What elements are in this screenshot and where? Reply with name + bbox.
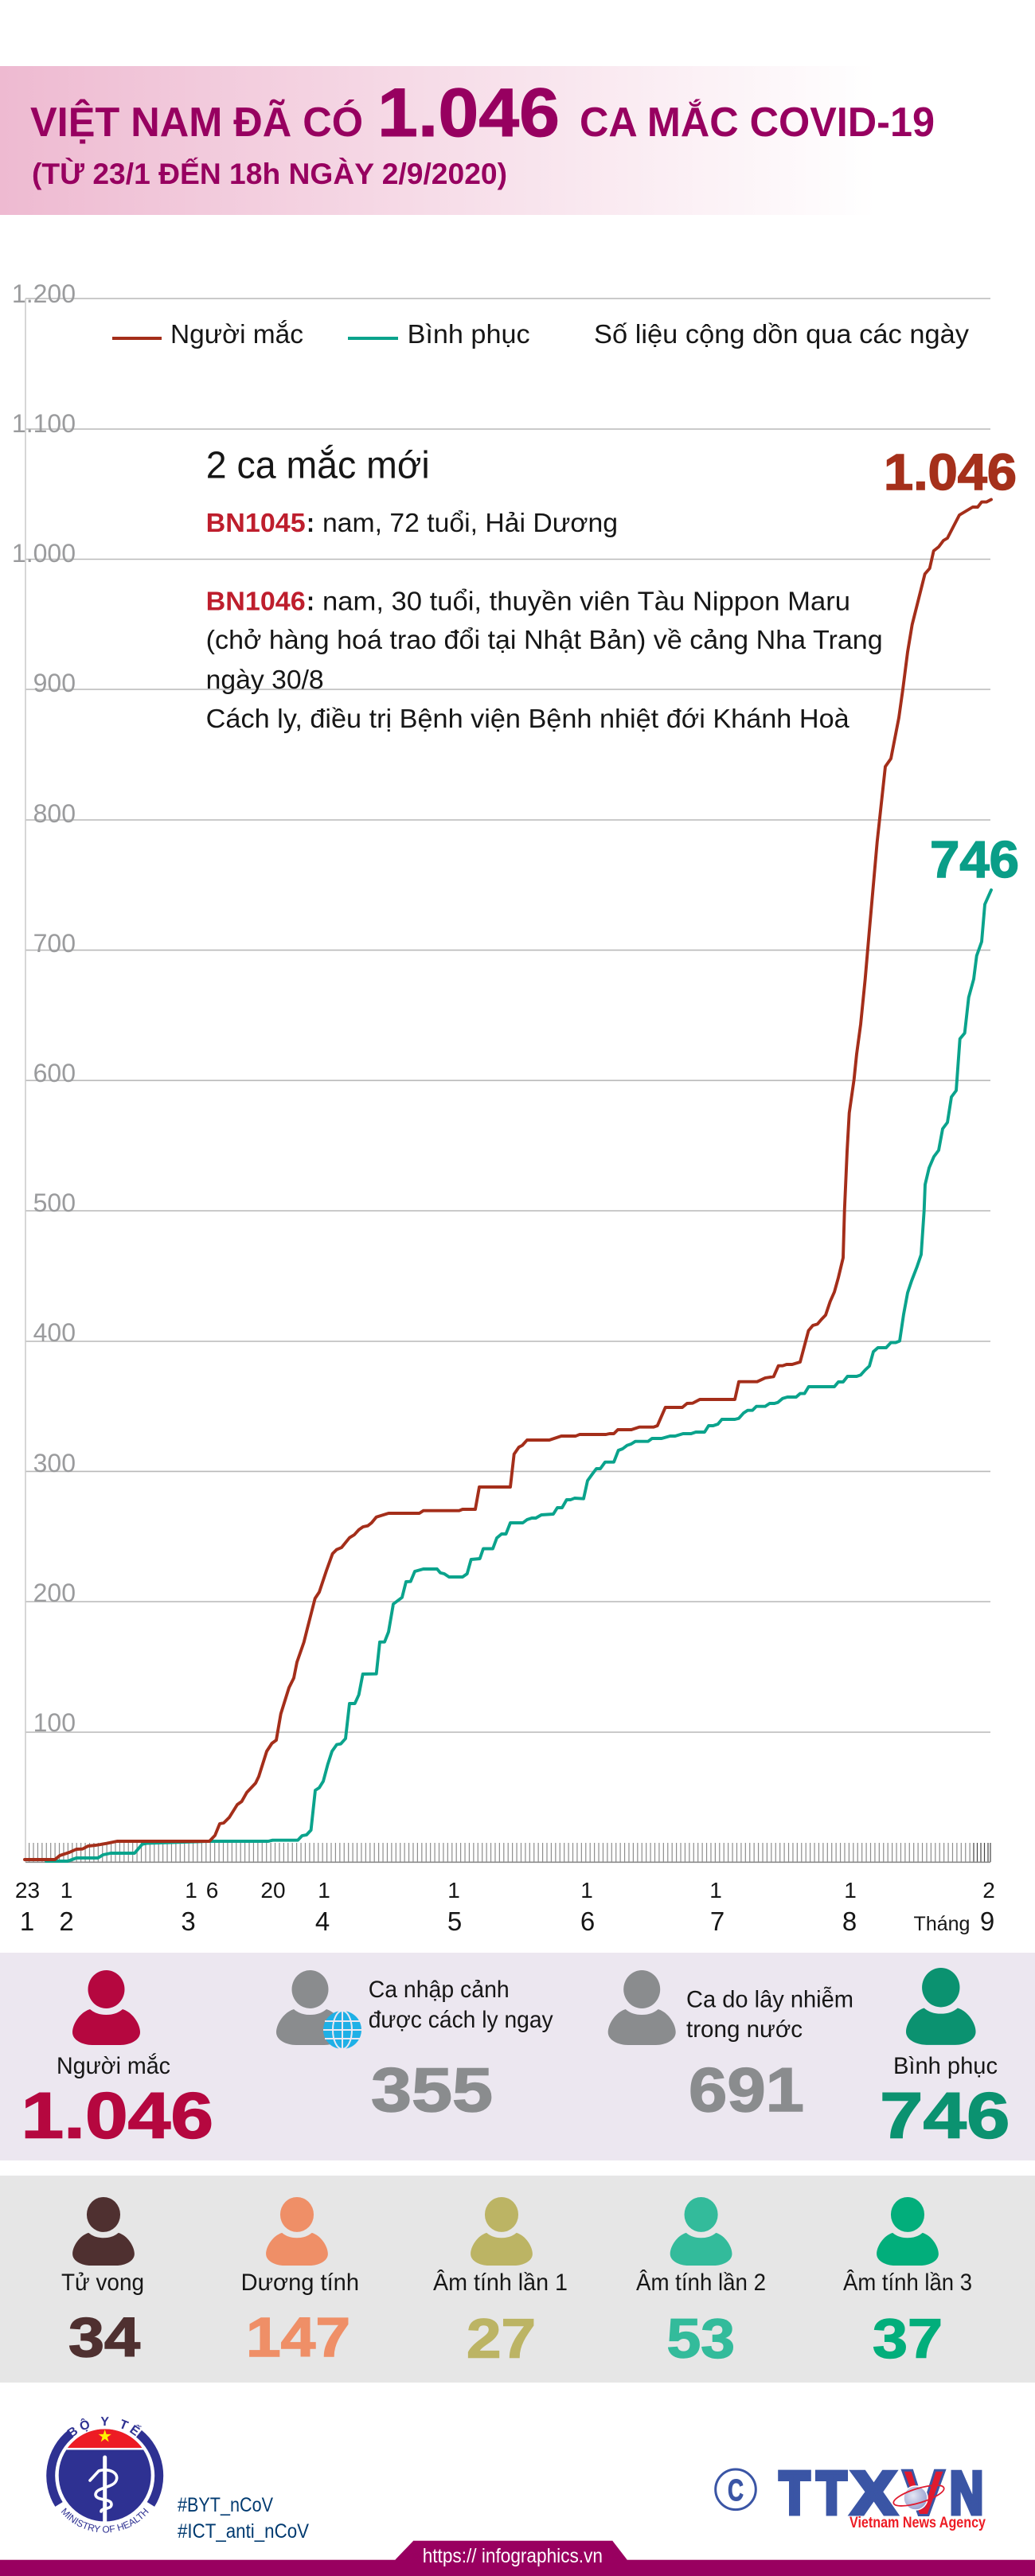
status: positive: Dương tính xyxy=(241,2270,359,2296)
stat: recovered: 746 xyxy=(880,2079,1010,2153)
agency name: Vietnam News Agency xyxy=(849,2514,986,2531)
x axis day labels: 2 xyxy=(982,1878,995,1903)
status: negative once: 27 xyxy=(467,2307,536,2369)
x axis day labels: 6 xyxy=(206,1878,218,1903)
patient 1046: ngày 30/8 xyxy=(206,665,324,694)
y axis labels: 900 xyxy=(33,669,76,697)
stat: domestic cases: 691 xyxy=(689,2055,804,2125)
status: negative twice: Âm tính lần 2 xyxy=(636,2270,766,2296)
hashtags: #BYT_nCoV xyxy=(178,2494,273,2516)
status: negative once: Âm tính lần 1 xyxy=(433,2270,568,2296)
x axis month labels: 4 xyxy=(315,1907,330,1936)
footer bar xyxy=(0,2541,1035,2576)
patient 1046 xyxy=(206,586,883,733)
status: deaths: Tử vong xyxy=(61,2270,144,2296)
callout: new cases xyxy=(206,444,883,733)
subtitle: (TỪ 23/1 ĐẾN 18h NGÀY 2/9/2020) xyxy=(32,157,507,190)
x axis day labels: 1 xyxy=(185,1878,197,1903)
legend xyxy=(112,319,970,349)
x axis month labels: 8 xyxy=(842,1907,857,1936)
x axis month labels: Tháng xyxy=(914,1913,970,1935)
patient 1046: (chở hàng hoá trao đổi tại Nhật Bản) về cảng Nha Trang xyxy=(206,625,883,654)
status: positive xyxy=(241,2197,359,2368)
x axis month labels: 6 xyxy=(580,1907,595,1936)
logo: TTXVN xyxy=(716,2457,986,2531)
x axis day labels: 1 xyxy=(709,1878,722,1903)
y axis labels: 500 xyxy=(33,1188,76,1217)
x axis day labels xyxy=(15,1878,995,1903)
patient 1046: : xyxy=(307,586,314,616)
x axis month labels: 1 xyxy=(20,1907,34,1936)
wordmark: T xyxy=(817,2460,846,2527)
patient 1046: BN1046 xyxy=(206,586,306,616)
icon: person recovered xyxy=(906,1968,976,2045)
legend: Bình phục xyxy=(408,319,530,349)
panel: totals xyxy=(0,1953,1035,2160)
stat: recovered: Bình phục xyxy=(893,2053,998,2079)
logo: Ministry of Health: BỘ Y TẾ xyxy=(67,2417,142,2437)
logo: Ministry of Health: MINISTRY OF HEALTH xyxy=(61,2508,149,2533)
patient 1045: : xyxy=(307,508,314,537)
line chart xyxy=(12,279,1019,1936)
y axis labels: 400 xyxy=(33,1318,76,1347)
title banner xyxy=(0,66,935,215)
x axis day labels: 1 xyxy=(844,1878,857,1903)
y axis labels: 600 xyxy=(33,1059,76,1087)
x axis month labels: 7 xyxy=(710,1907,724,1936)
status: negative three times: 37 xyxy=(873,2307,943,2369)
series: recovered xyxy=(46,890,991,1861)
series: cases xyxy=(25,500,991,1860)
x axis month labels xyxy=(20,1907,994,1936)
y axis labels: 100 xyxy=(33,1708,76,1737)
icon: person domestic xyxy=(608,1970,676,2045)
icon: person cases xyxy=(72,1970,140,2045)
wordmark xyxy=(779,2457,983,2530)
y axis labels: 700 xyxy=(33,929,76,958)
stat: recovered xyxy=(880,2053,1010,2153)
patient 1046: Cách ly, điều trị Bệnh viện Bệnh nhiệt đới Khánh Hoà xyxy=(206,704,849,733)
stat: imported cases: 355 xyxy=(371,2055,493,2125)
x axis month labels: 5 xyxy=(447,1907,462,1936)
status: deaths xyxy=(61,2197,144,2368)
patient 1045: BN1045 xyxy=(206,508,306,537)
source url: https:// infographics.vn xyxy=(423,2545,603,2567)
status: deaths: 34 xyxy=(68,2306,140,2368)
patient 1045: nam, 72 tuổi, Hải Dương xyxy=(322,508,618,537)
status: negative three times xyxy=(843,2197,972,2369)
stat: imported cases: được cách ly ngay xyxy=(369,2007,553,2033)
y axis labels xyxy=(12,279,76,1737)
x axis day labels: 23 xyxy=(15,1878,40,1903)
stat: imported cases: Ca nhập cảnh xyxy=(369,1977,510,2003)
status: negative twice xyxy=(636,2197,766,2369)
x axis day labels: 1 xyxy=(318,1878,330,1903)
x axis month labels: 9 xyxy=(980,1907,994,1936)
status: negative three times: Âm tính lần 3 xyxy=(843,2270,972,2296)
icon: copyright xyxy=(716,2469,756,2510)
x axis day labels: 1 xyxy=(61,1878,72,1903)
wordmark: X xyxy=(852,2460,896,2527)
heading: title: VIỆT NAM ĐÃ CÓ xyxy=(30,99,363,146)
icon: copyright: C xyxy=(728,2474,744,2508)
y axis labels: 1.200 xyxy=(12,279,76,308)
stat: total cases: 1.046 xyxy=(21,2079,213,2153)
stat: total cases xyxy=(21,2053,213,2153)
heading: title xyxy=(30,75,935,151)
stat: imported cases xyxy=(369,1977,553,2125)
status: negative twice: 53 xyxy=(667,2307,735,2369)
callout heading: 2 ca mắc mới xyxy=(206,444,430,487)
icon: person imported with globe xyxy=(276,1970,361,2049)
stat: total cases: Người mắc xyxy=(57,2053,170,2079)
legend: Người mắc xyxy=(170,319,303,349)
logo: Ministry of Health xyxy=(46,2417,164,2533)
status: positive: 147 xyxy=(246,2306,350,2368)
y axis labels: 1.100 xyxy=(12,409,76,438)
stat: domestic cases xyxy=(686,1987,853,2125)
legend: Số liệu cộng dồn qua các ngày xyxy=(594,319,970,349)
x axis month labels: 2 xyxy=(59,1907,74,1936)
heading: title: CA MẮC COVID-19 xyxy=(580,99,935,146)
x axis day labels: 20 xyxy=(260,1878,286,1903)
hashtags: #ICT_anti_nCoV xyxy=(178,2520,309,2543)
stat: domestic cases: Ca do lây nhiễm xyxy=(686,1987,853,2012)
heading: title: 1.046 xyxy=(377,75,560,151)
x axis day labels: 1 xyxy=(447,1878,460,1903)
panel: patient status xyxy=(0,2176,1035,2383)
wordmark: N xyxy=(950,2460,983,2527)
x axis day ticks xyxy=(25,1843,990,1862)
end value: recovered: 746 xyxy=(930,830,1019,888)
wordmark: T xyxy=(779,2460,810,2527)
stat: domestic cases: trong nước xyxy=(686,2016,803,2043)
wordmark: V xyxy=(902,2457,945,2530)
patient 1046: nam, 30 tuổi, thuyền viên Tàu Nippon Maru xyxy=(322,586,850,616)
status: negative once xyxy=(433,2197,568,2369)
y axis labels: 800 xyxy=(33,799,76,828)
y axis labels: 200 xyxy=(33,1579,76,1607)
hashtags xyxy=(178,2494,309,2543)
y axis labels: 1.000 xyxy=(12,539,76,568)
x axis day labels: 1 xyxy=(580,1878,593,1903)
y axis labels: 300 xyxy=(33,1449,76,1477)
end value: cases: 1.046 xyxy=(884,443,1017,501)
x axis month labels: 3 xyxy=(181,1907,196,1936)
